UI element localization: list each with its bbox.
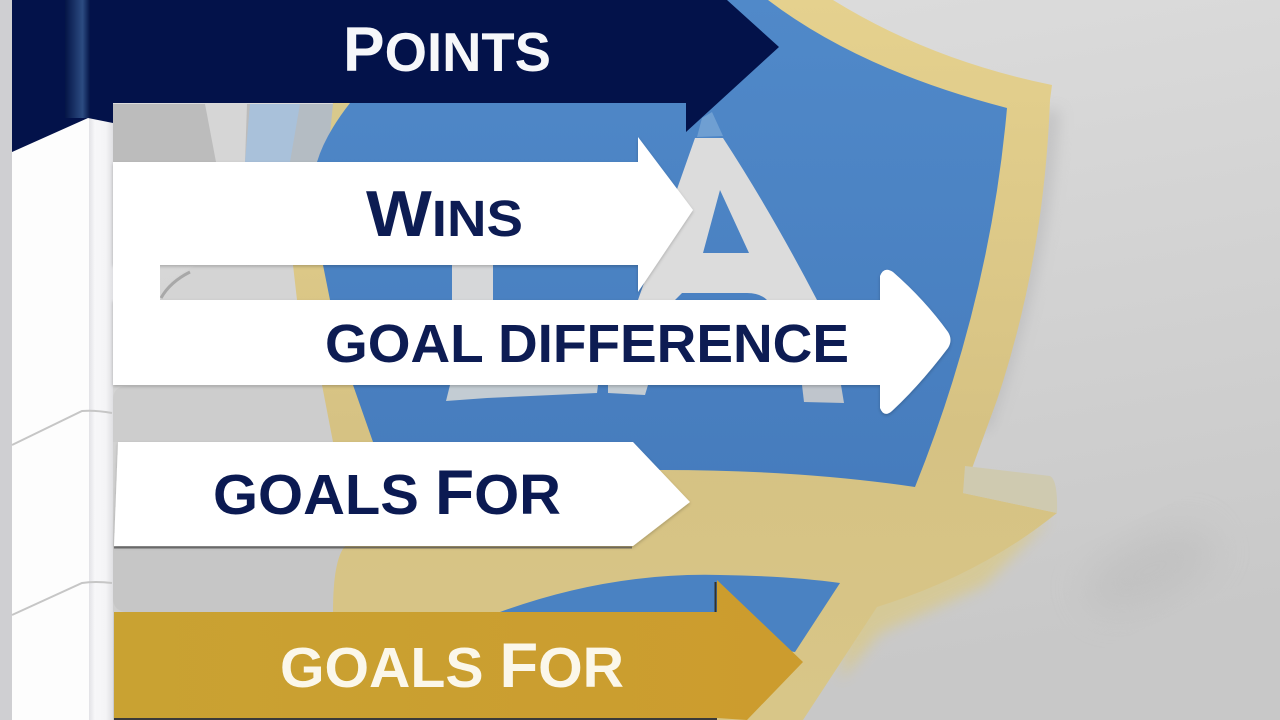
grey overlay on shield edge [290, 104, 345, 162]
letter L foot [446, 385, 598, 401]
label: Goal Difference: GOAL DIFFERENCE [325, 314, 849, 374]
shield lower blue band [500, 575, 840, 652]
left white column [12, 118, 113, 720]
wall shading [960, 110, 1227, 629]
letter A right foot [802, 385, 844, 403]
label: Goals For gold: GOALS FOR [280, 631, 624, 701]
gold sliver [330, 104, 350, 134]
shield faded corner [963, 466, 1057, 513]
shield gold body [293, 0, 1057, 720]
arrow: Points [12, 0, 779, 152]
label: Wins: WINS [366, 177, 523, 250]
arrow: Goals For gold [114, 580, 803, 720]
arrow: Goals For white [114, 442, 690, 548]
letter A [638, 138, 817, 300]
grey strip behind rows [113, 104, 353, 612]
shield faded lower edge [840, 518, 1050, 680]
arrow: Wins [113, 137, 693, 292]
arrow: Goal Difference [113, 270, 950, 414]
shield emblem [290, 0, 1057, 720]
letter L stem [452, 265, 493, 301]
shield blue field [317, 0, 1007, 487]
white fill between rows [113, 260, 160, 305]
letter A cap [697, 112, 723, 137]
pole [89, 118, 113, 720]
label: Points: POINTS [343, 15, 551, 85]
label: Goals For: GOALS FOR [213, 458, 561, 528]
left margin strip [0, 0, 12, 720]
letter A left foot [608, 385, 648, 395]
